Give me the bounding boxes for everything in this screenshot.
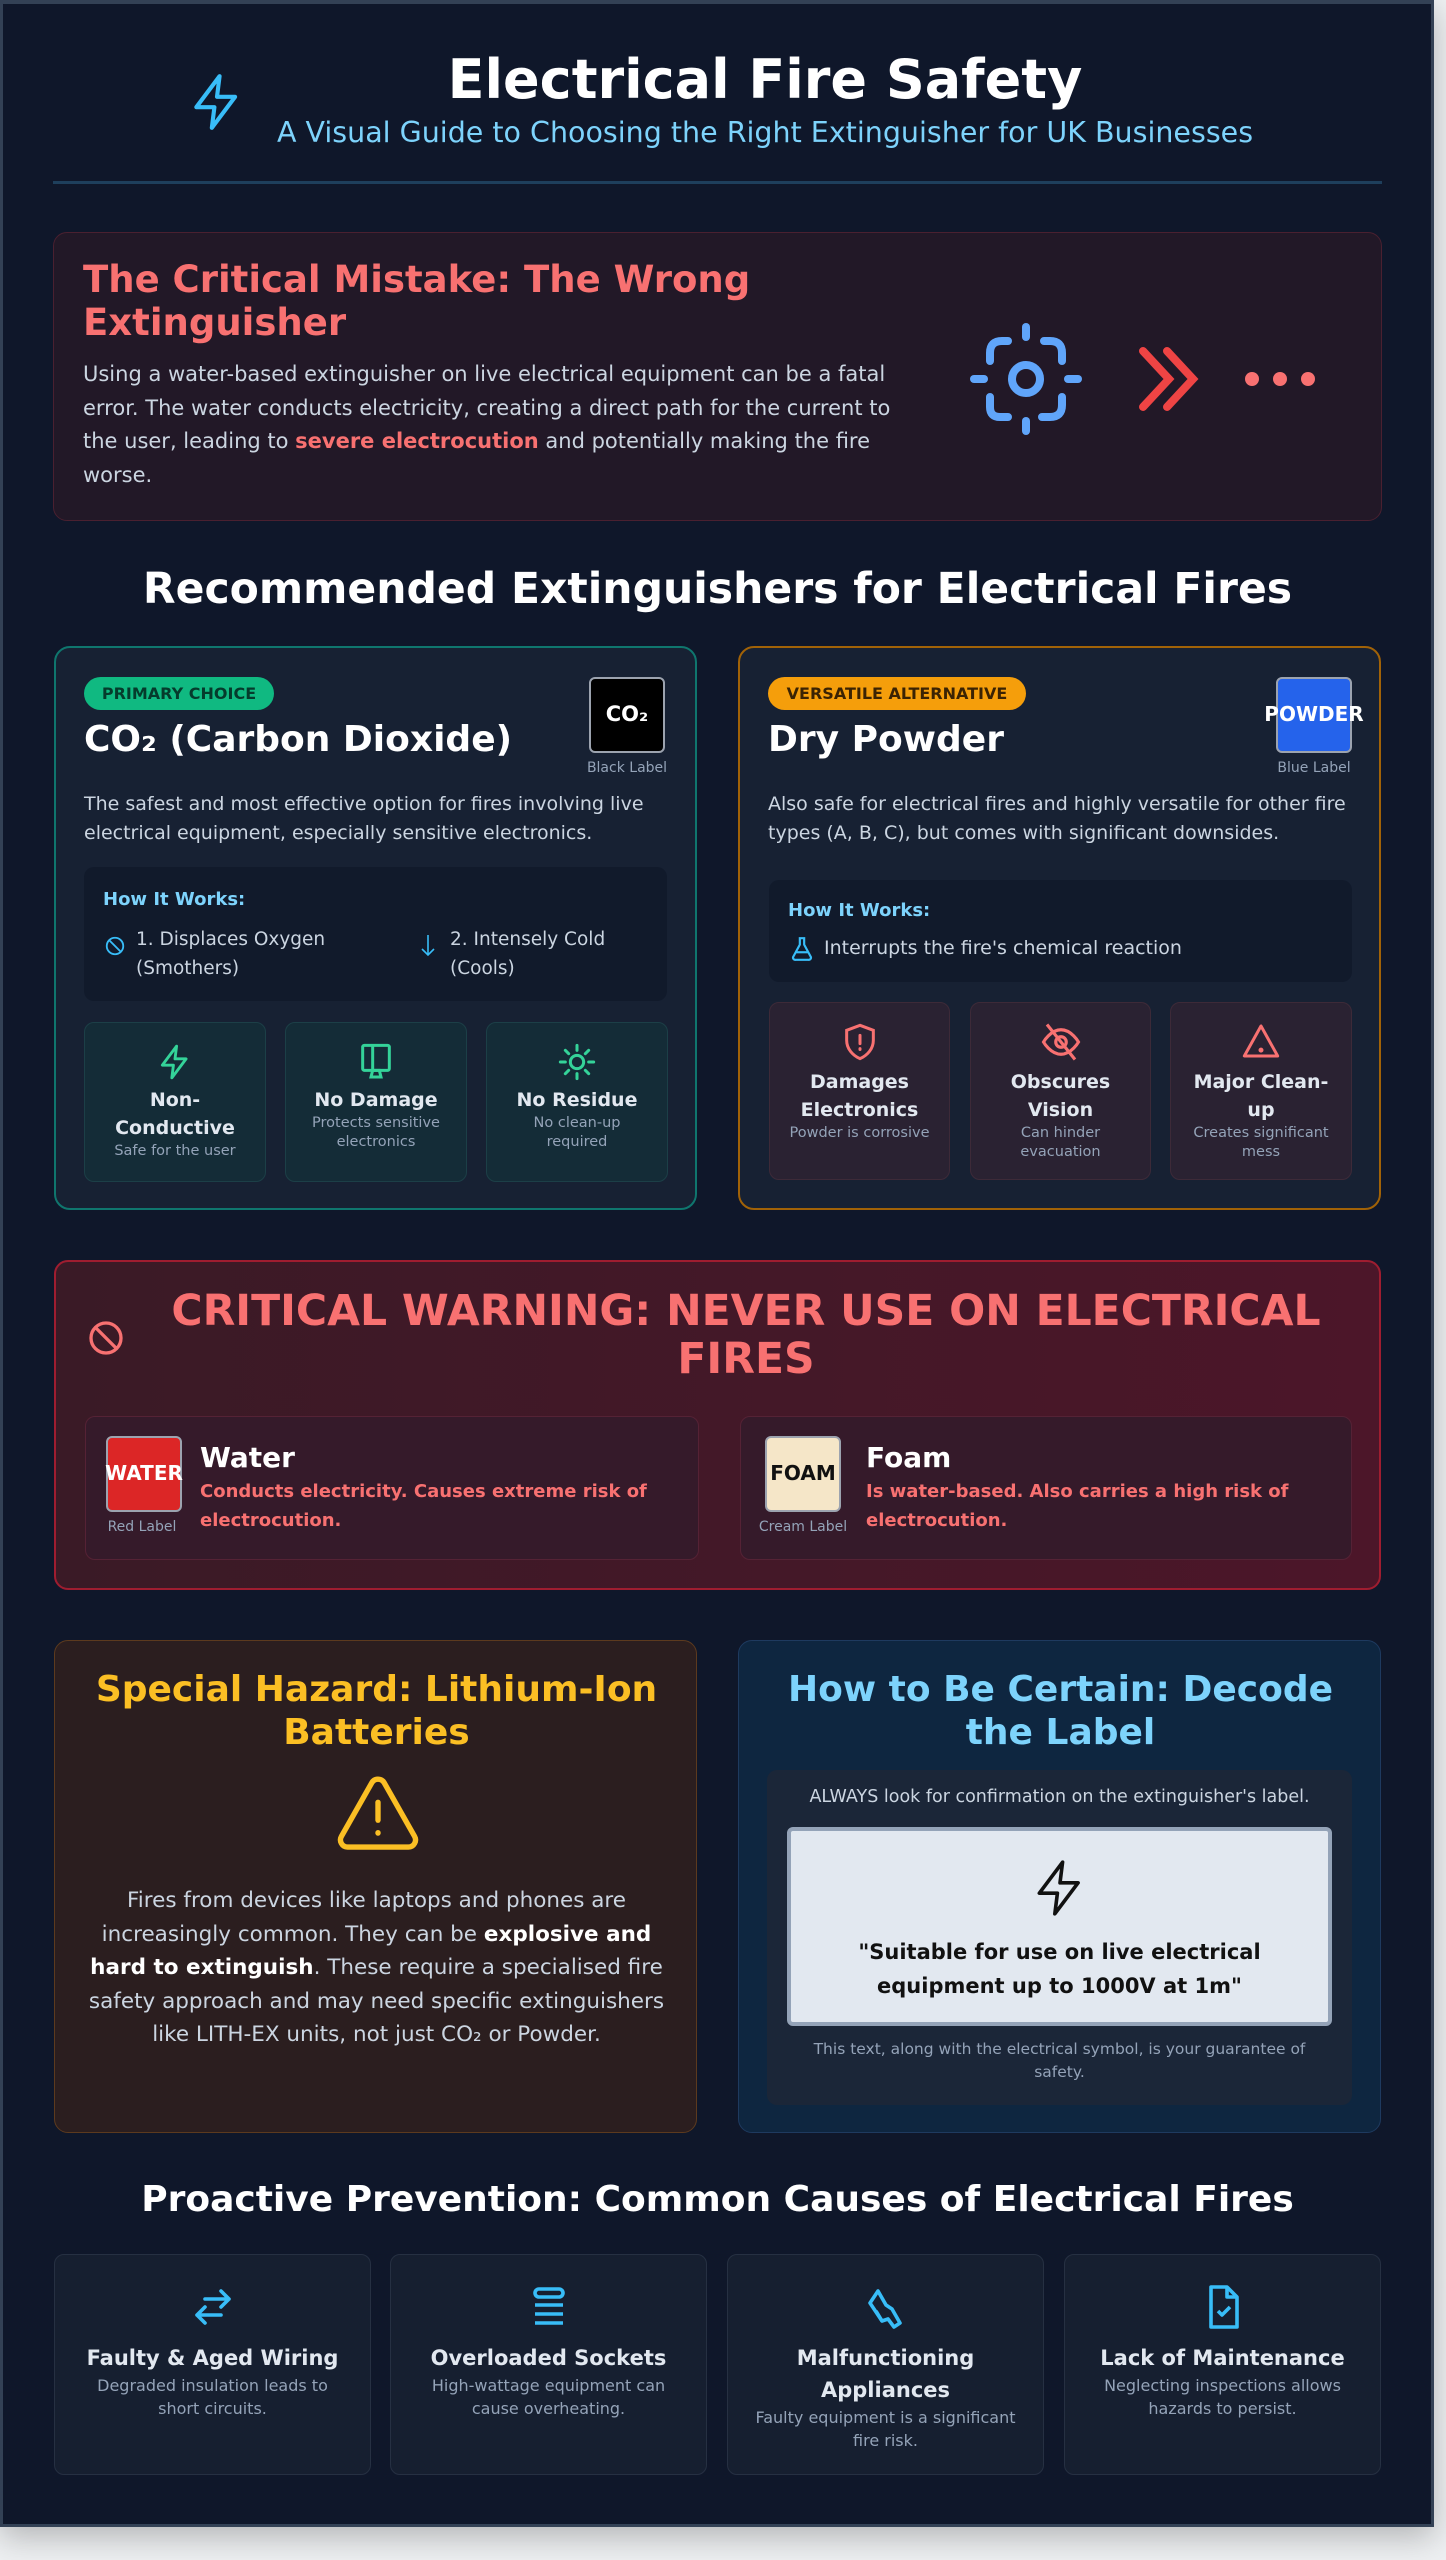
item: foam: Foam	[866, 1441, 951, 1474]
subtitle: A Visual Guide to Choosing the Right Extinguisher for UK Businesses	[277, 116, 1253, 149]
item: water: Red Label	[108, 1519, 176, 1535]
card: overloaded sockets: Overloaded Sockets	[431, 2346, 666, 2370]
how it works: powder: Interrupts the fire's chemical reaction	[824, 937, 1182, 959]
how it works: powder: How It Works:	[788, 900, 930, 921]
feature: obscures vision: evacuation	[1020, 1144, 1101, 1160]
card: lack of maintenance	[1064, 2254, 1381, 2475]
panel: dry powder card: POWDER	[1264, 702, 1364, 726]
heading: dry powder: Dry Powder	[768, 719, 1004, 760]
how it works: co2	[84, 867, 667, 1001]
feature: non-conductive: Non-	[150, 1089, 200, 1111]
card: overloaded sockets	[390, 2254, 707, 2475]
feature: no residue: No Residue	[517, 1089, 637, 1111]
heading: CO2: CO₂ (Carbon Dioxide)	[84, 719, 512, 760]
title: Electrical Fire Safety	[448, 48, 1082, 111]
feature: non-conductive: Conductive	[115, 1117, 235, 1139]
panel: dry powder card: Blue Label	[1277, 760, 1351, 776]
text: mistake description: Using a water-based extinguisher on live electrical equipment can be a fatal error. The water conducts electricity, creating a direct path for the current to the user, leading to severe electrocution and potentially making the fire worse.	[83, 362, 890, 486]
feature: no damage: electronics	[337, 1134, 415, 1150]
item: foam: Cream Label	[759, 1519, 847, 1535]
feature: no damage	[285, 1022, 467, 1182]
callout: label text	[787, 1827, 1332, 2026]
badge: primary choice	[84, 677, 274, 710]
heading: lithium: Special Hazard: Lithium-Ion Batteries	[96, 1669, 657, 1753]
panel: CO2 card: Black Label	[587, 760, 667, 776]
panel: lithium-ion hazard	[54, 1640, 697, 2133]
card: faulty wiring: Faulty & Aged Wiring	[87, 2346, 338, 2370]
card: lack of maintenance: Lack of Maintenance	[1100, 2346, 1345, 2370]
feature: non-conductive	[84, 1022, 266, 1182]
panel: CO2 card	[54, 646, 697, 1210]
how it works: co2: (Smothers)	[136, 958, 239, 979]
feature: major clean-up: Major Clean-	[1194, 1071, 1328, 1093]
card: malfunctioning appliances	[727, 2254, 1044, 2475]
heading: decode: How to Be Certain: Decode the Label	[788, 1669, 1333, 1753]
card: malfunctioning appliances: Malfunctioning	[797, 2346, 974, 2370]
text: powder description: Also safe for electrical fires and highly versatile for other fire types (A, B, C), but comes with significant downsides.	[768, 793, 1346, 844]
panel: dry powder card	[738, 646, 1381, 1210]
feature: no residue	[486, 1022, 668, 1182]
heading: critical warning: CRITICAL WARNING: NEVER USE ON ELECTRICAL FIRES	[171, 1287, 1321, 1384]
card: overloaded sockets: High-wattage equipment can cause overheating.	[432, 2376, 665, 2418]
feature: damages electronics: Damages	[810, 1071, 909, 1093]
card: lack of maintenance: Neglecting inspections allows hazards to persist.	[1104, 2376, 1341, 2418]
badge: versatile alternative	[768, 677, 1026, 710]
card: faulty wiring	[54, 2254, 371, 2475]
feature: major clean-up: Creates significant	[1193, 1125, 1329, 1141]
callout: label text: "Suitable for use on live electrical equipment up to 1000V at 1m"	[858, 1940, 1261, 1998]
badge: versatile alternative: VERSATILE ALTERNATIVE	[787, 684, 1007, 703]
item: foam	[740, 1416, 1352, 1560]
feature: no residue: required	[547, 1134, 607, 1150]
card: malfunctioning appliances: Appliances	[821, 2378, 950, 2402]
badge: primary choice: PRIMARY CHOICE	[102, 684, 256, 703]
label example box: ALWAYS look for confirmation on the extinguisher's label.	[809, 1787, 1310, 1807]
icon: blue label	[1276, 677, 1352, 753]
feature: no damage: No Damage	[314, 1089, 438, 1111]
how it works: powder	[769, 880, 1352, 982]
feature: major clean-up: mess	[1242, 1144, 1280, 1160]
icon: black label	[589, 677, 665, 753]
item: foam: FOAM	[770, 1461, 836, 1485]
heading: critical mistake: The Critical Mistake: The Wrong Extinguisher	[83, 258, 750, 344]
feature: damages electronics: Electronics	[801, 1099, 918, 1121]
card: faulty wiring: Degraded insulation leads to short circuits.	[97, 2376, 328, 2418]
item: water	[85, 1416, 699, 1560]
feature: no damage: Protects sensitive	[312, 1115, 440, 1131]
feature: obscures vision: Can hinder	[1021, 1125, 1100, 1141]
feature: non-conductive: Safe for the user	[114, 1143, 236, 1159]
heading: proactive prevention: Proactive Prevention: Common Causes of Electrical Fires	[141, 2179, 1294, 2220]
item: water: WATER	[105, 1461, 183, 1485]
label example box	[767, 1770, 1352, 2105]
item: foam: Is water-based. Also carries a high risk of electrocution.	[866, 1481, 1288, 1531]
how it works: co2: 2. Intensely Cold	[450, 929, 605, 950]
icon: warning triangle	[338, 1776, 418, 1850]
icon: black label: CO₂	[606, 702, 648, 726]
feature: obscures vision: Obscures	[1011, 1071, 1110, 1093]
feature: major clean-up	[1170, 1002, 1352, 1180]
icon: sequence gear chevrons dots	[970, 323, 1315, 435]
feature: damages electronics: Powder is corrosive	[790, 1125, 930, 1141]
card: malfunctioning appliances: Faulty equipment is a significant fire risk.	[756, 2408, 1016, 2450]
icon: ban	[89, 1321, 123, 1355]
how it works: co2: (Cools)	[450, 958, 515, 979]
feature: no residue: No clean-up	[534, 1115, 620, 1131]
panel: decode the label	[738, 1640, 1381, 2133]
heading: recommended extinguishers: Recommended Extinguishers for Electrical Fires	[143, 565, 1292, 614]
text: lithium body: Fires from devices like laptops and phones are increasingly common. They can be explosive and hard to extinguish. These require a specialised fire safety approach and may need specific extinguishers like LITH-EX units, not just CO₂ or Powder.	[89, 1888, 664, 2047]
item: water: Water	[200, 1441, 295, 1474]
feature: obscures vision: Vision	[1028, 1099, 1093, 1121]
feature: major clean-up: up	[1247, 1099, 1275, 1121]
feature: obscures vision	[970, 1002, 1151, 1180]
label example box: This text, along with the electrical symbol, is your guarantee of safety.	[814, 2040, 1305, 2081]
text: co2 description: The safest and most effective option for fires involving live electrical equipment, especially sensitive electronics.	[84, 793, 644, 844]
icon: header bolt	[194, 74, 238, 130]
how it works: co2: 1. Displaces Oxygen	[136, 929, 325, 950]
how it works: co2: How It Works:	[103, 889, 245, 910]
feature: damages electronics	[769, 1002, 950, 1180]
panel: critical warning	[54, 1260, 1381, 1590]
panel: critical mistake	[53, 232, 1382, 521]
item: water: Conducts electricity. Causes extreme risk of electrocution.	[200, 1481, 647, 1531]
